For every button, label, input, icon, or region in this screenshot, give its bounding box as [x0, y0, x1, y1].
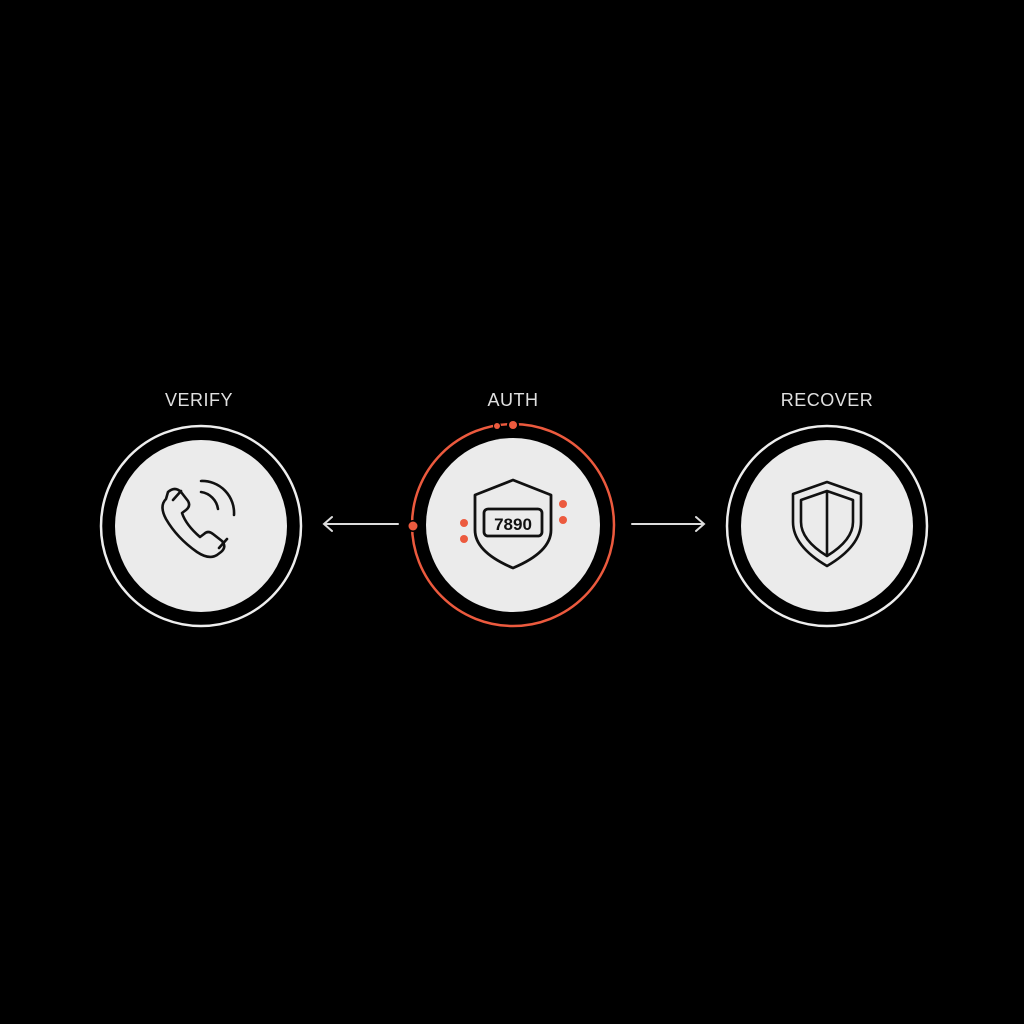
label: VERIFY: VERIFY: [165, 390, 233, 410]
node: auth: [407, 419, 614, 626]
node: verify: [101, 426, 301, 626]
icon: shield with code: [475, 480, 551, 568]
icon: shield with code: 7890: [494, 515, 532, 534]
icon: shield: [793, 482, 861, 566]
icon: phone: [162, 481, 234, 557]
arrow: left: [324, 517, 398, 531]
label: RECOVER: RECOVER: [781, 390, 873, 410]
arrow: right: [632, 517, 704, 531]
node: recover: [727, 426, 927, 626]
label: AUTH: AUTH: [488, 390, 538, 410]
